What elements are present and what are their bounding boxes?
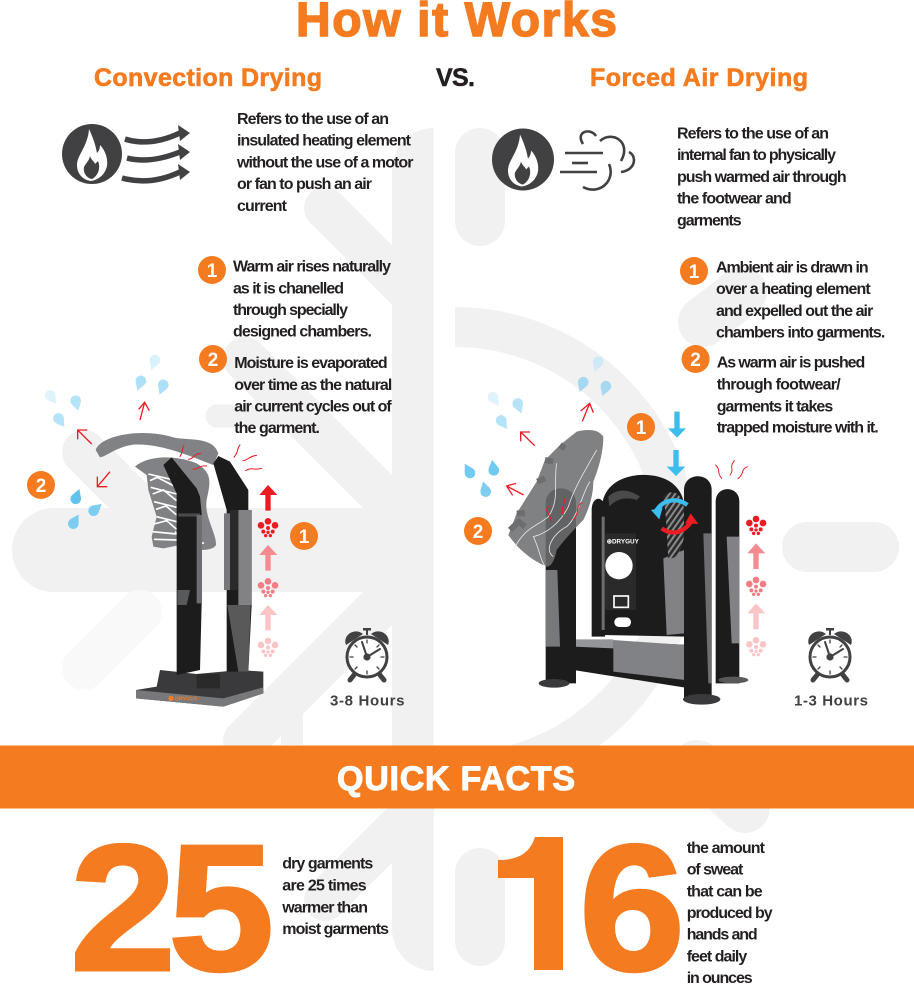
diagram badge 2: convection: 2 xyxy=(36,476,46,497)
text block: convection step 2: over time as the natural xyxy=(234,377,392,394)
step 1 badge: convection xyxy=(198,256,226,284)
diagram badge 2: convection xyxy=(27,471,55,499)
text block: fact 25: dry garments xyxy=(282,856,373,873)
icon: flame with fan air xyxy=(492,128,634,190)
text block: fact 25: warmer than xyxy=(281,899,368,916)
step 2 badge: convection xyxy=(199,345,227,373)
rotating air arrows xyxy=(651,500,698,532)
air intake arrows xyxy=(667,412,686,476)
diagram badge 1: convection xyxy=(290,522,318,550)
text block: fact 16 xyxy=(687,840,773,985)
text block: convection step 1: Warm air rises naturally xyxy=(233,259,391,276)
step 2 badge: forced air xyxy=(682,345,710,373)
icon: flame with heat arrows xyxy=(62,124,190,184)
label: 1-3 hours: 1-3 Hours xyxy=(794,693,868,710)
label: 3-8 hours: 3-8 Hours xyxy=(330,693,404,710)
text block: fact 16: hands and xyxy=(687,927,758,944)
text block: forced air step 1 xyxy=(716,259,885,342)
dryer body: ⊛DRYGUY xyxy=(607,538,640,545)
back right tube xyxy=(716,489,748,683)
text block: forced air step 2: As warm air is pushed xyxy=(717,355,865,372)
diagram badge 2: forced air xyxy=(464,517,492,545)
right tube xyxy=(213,456,252,672)
icon: alarm clock, 3-8 hours xyxy=(345,628,389,680)
dryer base xyxy=(572,639,690,688)
text block: convection definition: current xyxy=(237,198,288,215)
glove drying on dryer xyxy=(96,433,218,550)
text block: forced air step 1: and expelled out the air xyxy=(716,303,873,320)
text block: forced air definition: garments xyxy=(677,212,742,229)
dryer body xyxy=(602,475,685,637)
diagram badge 2: forced air: 2 xyxy=(473,522,483,543)
step 1 badge: convection: 1 xyxy=(207,261,218,282)
heading: convection drying: Convection Drying xyxy=(94,64,322,92)
text block: convection step 2: the garment. xyxy=(234,420,320,437)
text block: fact 16: that can be xyxy=(687,883,763,900)
icon: alarm clock, 1-3 hours xyxy=(808,628,852,680)
text block: forced air definition: internal fan to physically xyxy=(677,147,836,164)
big number: 16 xyxy=(498,837,680,974)
text block: fact 25: moist garments xyxy=(282,921,389,938)
illustration: convection dryer with glove xyxy=(43,353,278,707)
diagram badge 1: convection: 1 xyxy=(299,527,310,548)
text block: forced air step 2: through footwear/ xyxy=(717,377,841,394)
text block: convection definition: or fan to push an air xyxy=(237,176,372,193)
rising heat arrows and dots xyxy=(746,516,766,656)
rising heat arrows and dots xyxy=(258,485,278,657)
illustration: forced air dryer with shoe xyxy=(460,355,766,705)
text block: convection step 1: as it is chanelled xyxy=(233,280,344,297)
diagram badge 1: forced air xyxy=(627,413,655,441)
text block: convection definition: Refers to the use of an xyxy=(237,111,389,128)
step 1 badge: forced air: 1 xyxy=(689,262,700,283)
back left tube xyxy=(592,499,605,637)
text block: forced air definition: push warmed air through xyxy=(677,169,847,186)
evaporation arrows xyxy=(507,403,593,495)
text block: convection definition xyxy=(236,111,414,215)
moisture drops xyxy=(460,355,613,498)
text block: forced air step 2 xyxy=(717,355,879,437)
moisture drops xyxy=(43,353,170,531)
front right tube xyxy=(683,476,720,705)
text block: forced air step 2: garments it takes xyxy=(717,398,833,415)
left tube xyxy=(539,488,576,688)
text block: convection step 2: Moisture is evaporated xyxy=(234,355,388,372)
text block: forced air step 1: chambers into garments. xyxy=(716,325,885,342)
step 1 badge: forced air xyxy=(680,257,708,285)
banner heading: QUICK FACTS xyxy=(337,760,575,798)
evaporation arrows xyxy=(78,402,149,487)
left tube xyxy=(163,457,202,675)
text block: convection step 2: air current cycles out of xyxy=(234,399,392,416)
text block: forced air definition xyxy=(677,125,847,229)
text block: convection step 1 xyxy=(233,259,391,341)
heading: forced air drying: Forced Air Drying xyxy=(590,64,808,92)
text block: fact 16: produced by xyxy=(687,905,773,922)
text block: forced air definition: the footwear and xyxy=(677,191,792,208)
base tray: DRYGUY xyxy=(175,696,198,702)
step 2 badge: forced air: 2 xyxy=(690,350,701,371)
text block: convection definition: without the use of a motor xyxy=(236,154,414,171)
text block: fact 25: are 25 times xyxy=(282,878,367,895)
text block: fact 16: feet daily xyxy=(687,949,747,966)
diagram badge 1: forced air: 1 xyxy=(636,418,647,439)
text block: fact 16: the amount xyxy=(687,840,766,857)
base tray xyxy=(136,670,263,707)
quick facts banner xyxy=(0,746,914,808)
text block: forced air step 2: trapped moisture with it. xyxy=(717,420,879,437)
text block: forced air definition: Refers to the use of an xyxy=(677,125,829,142)
heat wiggles xyxy=(180,445,262,471)
text block: convection step 1: through specially xyxy=(233,302,348,319)
shoe xyxy=(508,430,603,567)
heading: versus: VS. xyxy=(436,64,475,92)
text block: convection definition: insulated heating element xyxy=(237,133,412,150)
text block: fact 16: of sweat xyxy=(687,862,744,879)
text block: fact 25 xyxy=(281,856,389,938)
heat wiggles xyxy=(547,461,747,522)
text block: forced air step 1: Ambient air is drawn in xyxy=(716,259,869,276)
text block: convection step 1: designed chambers. xyxy=(233,324,372,341)
text block: forced air step 1: over a heating element xyxy=(716,281,871,298)
step 2 badge: convection: 2 xyxy=(208,350,218,371)
text block: convection step 2 xyxy=(234,355,392,437)
